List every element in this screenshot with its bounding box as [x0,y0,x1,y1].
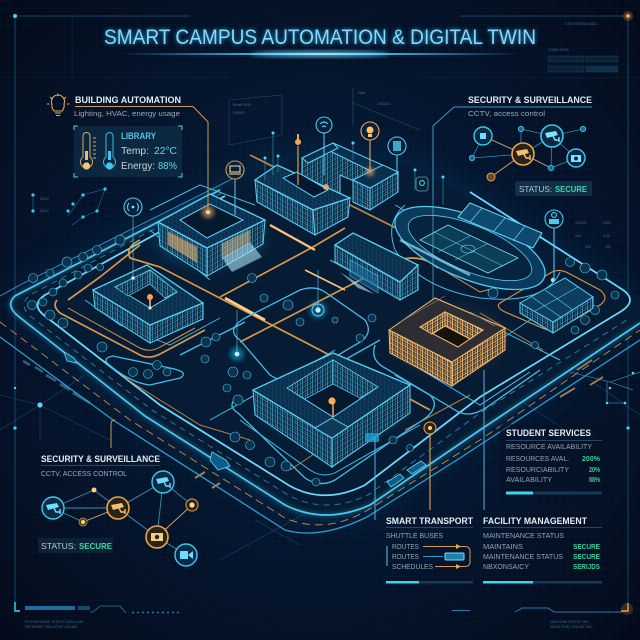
subheading: CCTV, access control [468,109,545,118]
sensor readouts right: 0:00 [603,234,610,238]
icon: sensor square [416,177,428,191]
panel: facility management [483,516,602,584]
rows: 20% [589,465,600,474]
data panel near map: 000000 [378,102,390,106]
node: cyan camera left [42,497,64,519]
hud data readouts top right: LOGIN DATA [548,48,569,52]
lower grid and data marks outside the ring road [0,360,640,560]
value: energy: 88% [158,160,177,172]
camera network [42,471,198,566]
vehicles [64,352,426,487]
label: library: LIBRARY [121,131,156,141]
heading: BUILDING AUTOMATION [75,95,181,105]
heading rule and leader [41,420,160,466]
hud status strip bottom left: SYSTEM NODE STATUS DATA LINK [25,620,84,624]
icon: thermometer pin [296,134,300,185]
route rows: ROUTES [392,542,419,551]
panel: security and surveillance bottom left [38,420,198,566]
hud status strip bottom right [452,608,622,629]
metric: energy: Energy: [121,160,155,172]
data panel near map: Smart 0000 [233,103,251,107]
sensor readouts right: 0000 [603,221,611,225]
sensor readouts right [575,221,611,249]
status badge: STATUS: [519,184,552,194]
icon: server [388,137,406,175]
subheading: Lighting, HVAC, energy usage [74,109,180,118]
progress bar [386,528,473,584]
ring road [0,175,640,533]
sensor dot network left [31,187,107,225]
sensor readouts right: 000000 [575,221,587,225]
sensor readouts right: 000 [605,245,611,249]
hud data readouts top right: 0:00 SYSTEM DATA [565,22,598,26]
rows [483,542,600,571]
sensor poles above map [264,132,444,205]
node: cyan camera [541,125,563,147]
glowing plaza nodes [131,200,433,361]
title: SMART CAMPUS AUTOMATION & DIGITAL TWIN [104,26,536,49]
sensor dot network left: 000.0 [40,209,49,213]
data panel near map: Data [358,91,365,95]
hud status strip bottom right: NODE SYNC ONLINE 000 [550,625,592,629]
icon: light bulb [47,94,70,116]
building: center hall [335,233,418,300]
title underline [120,51,520,57]
building: west hall [93,265,203,343]
status badge: STATUS: [41,541,76,551]
panel: smart transport [386,516,473,584]
icon: light bulb pin [361,122,379,172]
route arrows and bus [423,544,470,569]
campus isometric map [0,143,640,533]
hud status strip bottom right: DATA LINK STATUS 000 [550,620,589,624]
node: orange camera [512,143,534,165]
rows: 200% [582,454,600,463]
building: library [155,194,265,276]
rows: SECURE [573,552,600,561]
panel: student services [506,428,602,494]
node: cyan camera top [152,471,174,493]
stadium and track [384,189,556,307]
metric: temperature: Temp: [121,145,149,157]
tennis courts [520,278,593,333]
heading: SMART TRANSPORT [386,516,473,526]
node: photo camera [567,149,585,167]
cyan road network [85,185,560,484]
panel: student services backing [500,424,612,500]
data panel near map: 000000 [233,111,245,115]
rows: SECURE [573,542,600,551]
map pin icons [124,117,563,282]
status badge: SECURE [79,541,112,551]
node: orange dot [186,499,198,511]
subheading: CCTV, ACCESS CONTROL [41,469,127,478]
status badge [38,538,113,553]
sensor dot network left: 000.0 [40,197,49,201]
heading: FACILITY MANAGEMENT [483,516,587,526]
rows: NBXONSAICY [483,562,529,571]
sensor network [469,125,586,181]
node: photo camera [146,526,168,548]
progress bar [506,440,602,494]
subheading: SHUTTLE BUSES [386,531,443,540]
icon: wifi signal [124,198,142,216]
icon: access lock [545,210,563,282]
library card [74,126,182,177]
rows: RESOURCES AVAL. [506,454,569,463]
rows: RESOURCIABILITY [506,465,569,474]
building: orange digital twin hall [389,296,505,386]
rows: SERIJDS [573,562,600,571]
rows: AVAILABILITY [506,475,552,484]
heading: STUDENT SERVICES [506,428,591,438]
icon: wifi [316,117,332,175]
building: south hall [253,353,410,467]
rows: MAINTAINS [483,542,523,551]
rows: MAINTENANCE STATUS [483,552,563,561]
panel: building automation [47,94,208,212]
panel: security and surveillance top right [433,95,592,200]
orange road network [55,155,605,470]
leader line [433,107,592,200]
node: orange camera [107,497,129,519]
hud status strip bottom left: NETWORK TWIN SYNC ONLINE [25,625,78,629]
progress bar [483,528,602,584]
value: temperature: 22°C [154,145,177,157]
data panel near map [229,88,420,145]
sensor readouts right: 000 [585,245,591,249]
trees [28,235,619,486]
status badge [515,181,592,196]
icon: laptop [226,161,244,215]
hud data readouts top right [548,22,618,72]
icon: blue thermometer [103,132,115,170]
route rows: SCHEDULES [392,562,433,571]
sensor readouts right: 000 [575,234,581,238]
rows [506,454,600,484]
node: sensor [474,127,492,145]
hud status strip bottom left [25,606,182,629]
status badge: SECURE [555,184,587,194]
node: video camera [175,544,197,566]
leader line [75,106,208,212]
subheading: RESOURCE AVAILABILITY [506,442,592,451]
route rows: ROUTES [392,552,419,561]
subheading: MAINTENANCE STATUS [483,531,564,540]
heading: SECURITY & SURVEILLANCE [41,454,160,464]
icon: orange thermometer [81,132,96,170]
building: north hall [255,143,398,235]
heading: SECURITY & SURVEILLANCE [468,95,592,105]
campus base ground [11,155,640,515]
leader lines to bottom panels [375,370,484,520]
route rows [387,542,433,571]
rows: 88% [589,475,600,484]
